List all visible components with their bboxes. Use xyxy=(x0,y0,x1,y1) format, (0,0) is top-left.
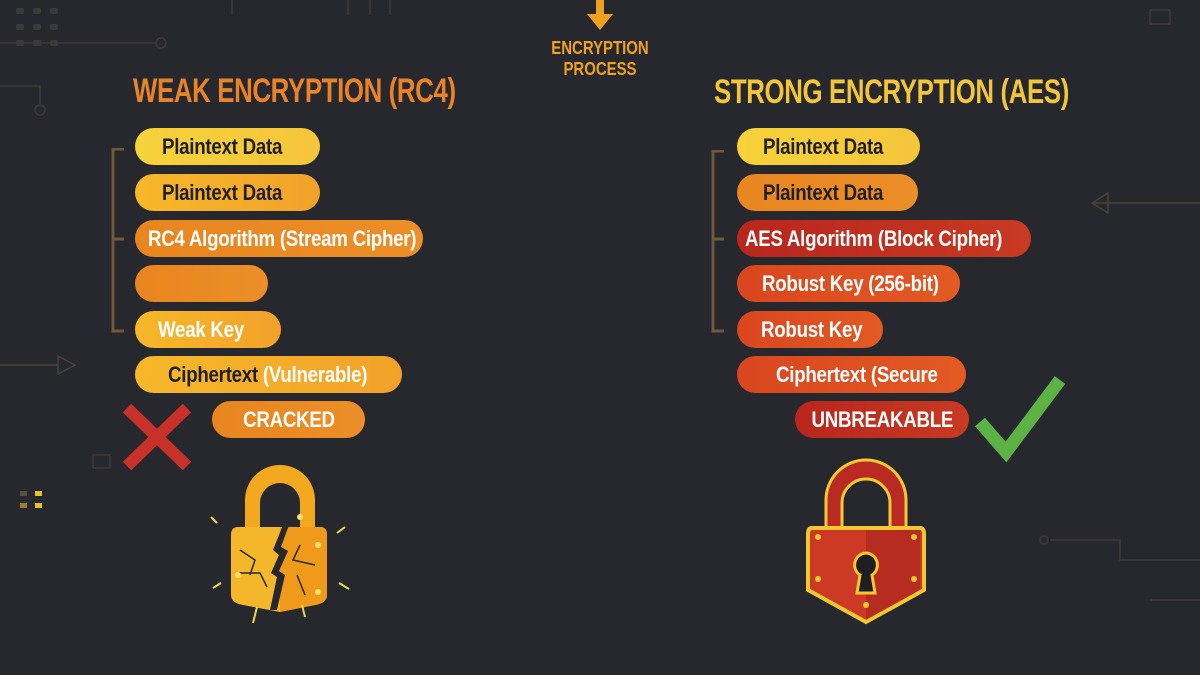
icon: cracked padlock xyxy=(210,465,350,624)
pill: robust key: Robust Key xyxy=(761,317,862,342)
pill: robust key 256 xyxy=(737,265,960,302)
pill: weak key xyxy=(135,311,281,348)
arrow: encryption process xyxy=(587,0,613,30)
panel: weak steps xyxy=(112,148,124,332)
pill: AES algorithm xyxy=(737,220,1031,257)
heading: strong encryption: STRONG ENCRYPTION (AES) xyxy=(714,73,1069,111)
bracket xyxy=(112,148,124,332)
pill: ciphertext vulnerable: Ciphertext (Vulnerable) xyxy=(168,362,367,387)
icon: secure padlock xyxy=(806,458,926,624)
pill: plaintext 2: Plaintext Data xyxy=(763,180,883,205)
pill: plaintext 1 xyxy=(135,128,320,165)
pill: AES algorithm: AES Algorithm (Block Cipher) xyxy=(745,226,1002,251)
pill: robust key xyxy=(737,311,883,348)
pill: RC4 algorithm: RC4 Algorithm (Stream Cipher) xyxy=(148,226,416,251)
pill: ciphertext vulnerable xyxy=(135,356,402,393)
pill: plaintext 2: Plaintext Data xyxy=(162,180,282,205)
pill: unbreakable: UNBREAKABLE xyxy=(811,407,953,432)
label: encryption process xyxy=(551,38,649,79)
pill: ciphertext secure xyxy=(737,356,966,393)
label: encryption process: ENCRYPTION xyxy=(551,38,649,58)
pill: cracked: CRACKED xyxy=(243,407,334,432)
icon: green check xyxy=(975,376,1066,462)
pill: RC4 algorithm xyxy=(135,220,423,257)
pill: plaintext 1: Plaintext Data xyxy=(162,134,282,159)
pill: ciphertext secure: Ciphertext (Secure xyxy=(776,362,938,387)
label: encryption process: PROCESS xyxy=(563,59,637,79)
pill: plaintext 1 xyxy=(737,128,920,165)
panel: strong steps xyxy=(712,150,724,332)
pill: plaintext 1: Plaintext Data xyxy=(763,134,883,159)
heading: weak encryption: WEAK ENCRYPTION (RC4) xyxy=(133,72,456,110)
pill: plaintext 2 xyxy=(135,174,320,211)
pill: unbreakable xyxy=(795,401,969,438)
pill: cracked xyxy=(212,401,365,438)
pill: empty xyxy=(135,265,268,302)
icon: red X xyxy=(123,404,191,470)
pill: weak key: Weak Key xyxy=(158,317,244,342)
pill: robust key 256: Robust Key (256-bit) xyxy=(762,271,939,296)
pill: plaintext 2 xyxy=(737,174,918,211)
bracket xyxy=(712,150,724,332)
